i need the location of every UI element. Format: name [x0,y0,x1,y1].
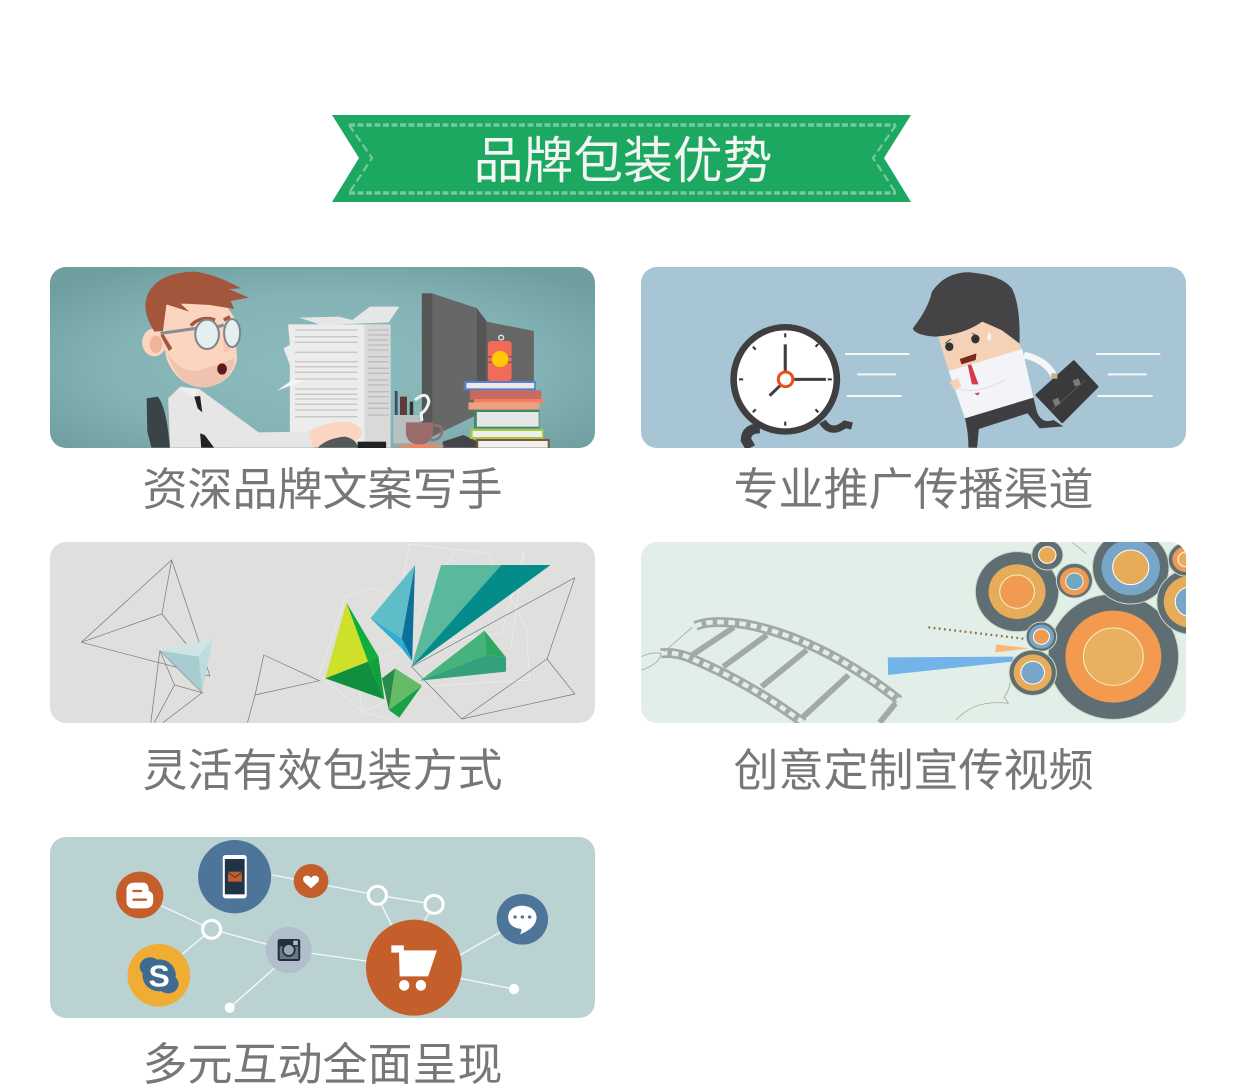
icon: concentric circles [975,531,1225,719]
icon: pale crystal [160,639,213,692]
panel: copywriter illustration [50,267,595,448]
caption: video: 创意定制宣传视频 [733,745,1094,796]
icon: speed lines [845,354,1160,396]
character: running businessman [913,272,1097,448]
caption: channels: 专业推广传播渠道 [733,464,1094,515]
caption: copywriter: 资深品牌文案写手 [142,464,502,515]
title banner: 品牌包装优势 [474,133,772,189]
icon: light beams [888,543,1087,720]
icon: teal crystal [411,565,551,667]
icon: emerald crystal [420,631,506,681]
icon: shopping cart [366,920,462,1016]
character: writer [142,272,386,448]
icon: blue crystal [370,565,415,662]
icon: small green crystal [382,668,422,718]
caption: packaging: 灵活有效包装方式 [142,745,502,796]
icon: coffee cup [396,395,444,448]
icon: blogger [116,872,163,918]
icon: yellow-green crystal [325,603,384,699]
icon: heart [294,864,328,898]
icon: chair [147,397,170,448]
icon: skype [128,944,190,1007]
icon: soda can [488,335,512,381]
icon: monitor [422,293,534,448]
icon: paper stack [277,307,399,448]
icon: network lines [161,875,523,1008]
icon: film strip [642,622,899,723]
icon: instagram [266,927,312,973]
chart: white wireframes [319,544,530,723]
icon: pen holder [393,391,419,443]
panel: video illustration [641,542,1186,723]
icon: running clock [730,324,852,448]
icon: phone mail [198,840,271,913]
caption: interaction: 多元互动全面呈现 [142,1039,502,1090]
panel: channels illustration [641,267,1186,448]
icon: skype: S [148,959,170,994]
panel: geometric illustration [50,542,595,723]
chart: grey wireframes [81,560,575,723]
icon: network nodes [203,886,517,1011]
icon: chat bubble [497,894,548,945]
title banner [332,115,911,202]
panel: social network illustration [50,837,595,1018]
icon: book pile [464,381,550,449]
